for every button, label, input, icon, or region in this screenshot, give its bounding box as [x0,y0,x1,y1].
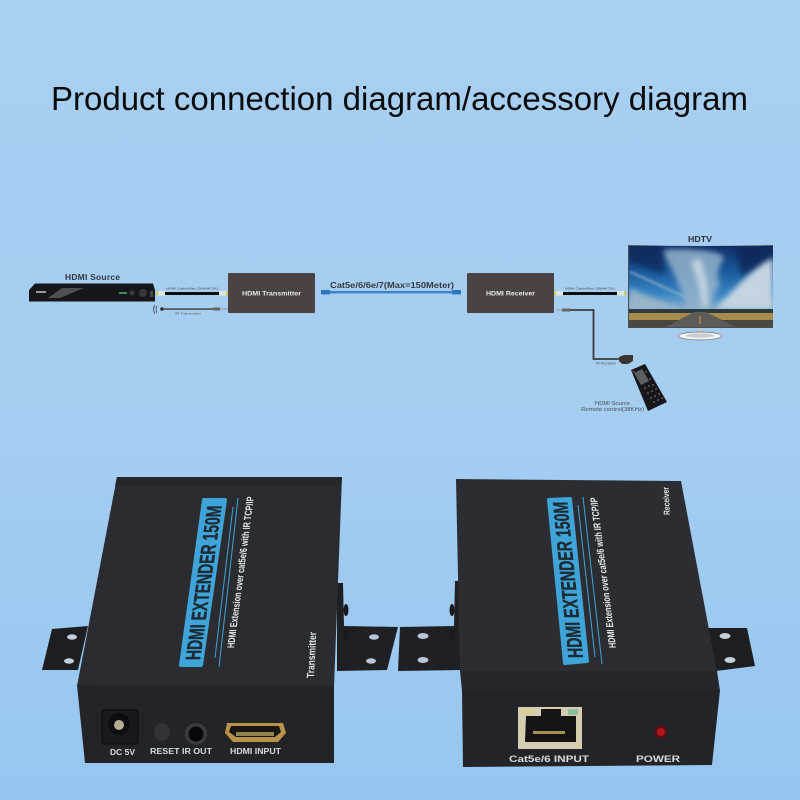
label pill [549,499,587,663]
IR receiver cable: IR Receiver [596,362,617,366]
HDMI receiver box: HDMI Receiver [486,290,535,298]
port labels: HDMI INPUT [230,747,281,756]
remote control label: Remote control(38KHz) [581,407,644,413]
front panel [462,690,720,767]
left mounting flange [398,581,462,671]
network cable with label: Cat5e/6/6e/7(Max=150Meter) [330,280,454,290]
Transmitter label: Transmitter [305,632,319,678]
HDMI cable: source to transmitter [156,286,228,296]
HDMI cable: receiver to TV [554,286,626,296]
pill text: HDMI EXTENDER 150M [549,502,588,658]
HDMI receiver box [467,273,554,313]
port labels: DC 5V [110,748,136,757]
front lip [460,671,720,691]
IR transmitter cable: IR Transmitter [175,312,201,316]
right mounting flange [337,583,398,671]
top face [77,477,342,687]
IR receiver cable [556,308,633,366]
HDMI transmitter box: HDMI Transmitter [242,290,302,298]
front panel [77,685,334,763]
left mounting flange [42,626,88,670]
port labels [509,754,680,765]
subtitle text: HDMI Extension over cat5e/6 with IR TCP/IP [226,496,257,648]
label stripes [578,497,602,664]
RJ45 port [518,707,582,749]
icon: remote control [631,364,667,411]
subtitle text: HDMI Extension over cat5e/6 with IR TCP/IP [589,497,619,648]
product: receiver unit [398,479,755,767]
HDMI source label: HDMI Source [65,272,120,282]
connection diagram [29,234,773,413]
right mounting flange [708,628,755,671]
Receiver label: Receiver [661,487,672,515]
port labels [110,747,281,757]
DC jack [102,710,138,744]
HDTV label: HDTV [688,234,712,244]
port labels: POWER [636,754,680,765]
port labels: RESET IR OUT [150,747,212,756]
title: Product connection diagram/accessory diagram [51,81,748,118]
HDMI cable: source to transmitter: HDMI Cable(Max 15M/4K*2K) [166,286,218,290]
label stripes [215,498,238,667]
power LED [654,726,668,738]
icon: HDMI source player [29,284,155,302]
HDMI cable: receiver to TV: HDMI Cable(Max 15M/4K*2K) [565,286,615,290]
network cable with label [321,280,461,294]
pill text: HDMI EXTENDER 150M [182,506,227,660]
port labels: Cat5e/6 INPUT [509,754,589,765]
remote control label [581,401,644,413]
label pill [181,500,225,665]
remote control label: HDMI Source [595,401,630,407]
reset button [154,723,170,741]
HDMI transmitter box [228,273,315,313]
HDMI port [225,723,286,742]
top face [456,479,717,672]
IR out jack [185,723,207,745]
product: transmitter unit [42,477,398,763]
icon: HDTV [628,245,773,340]
IR transmitter cable [154,305,228,316]
